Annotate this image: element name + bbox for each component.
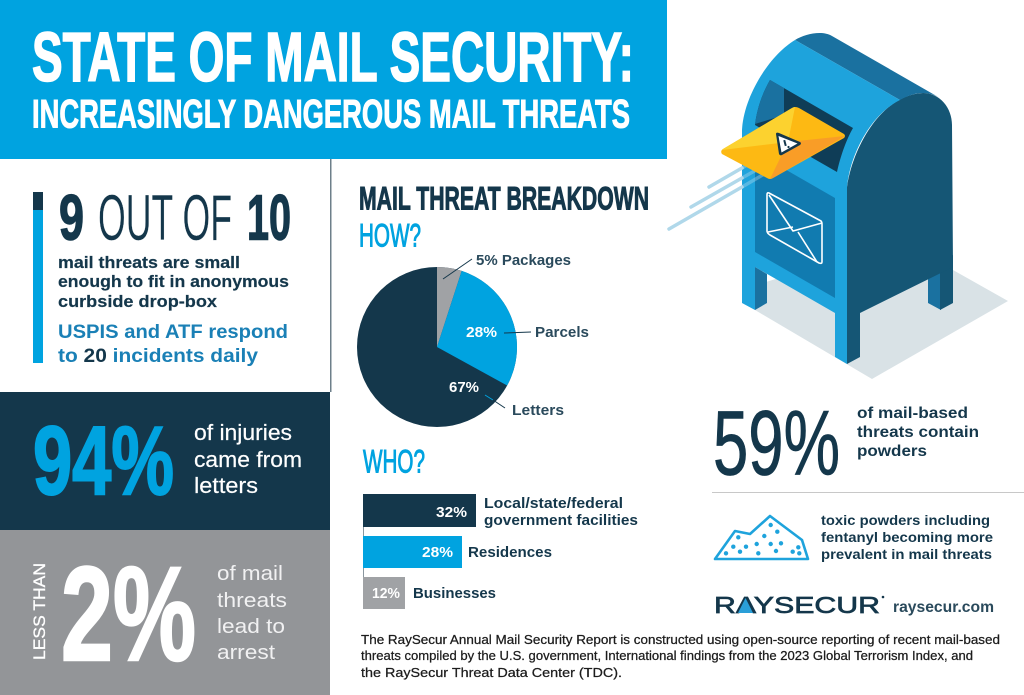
link: raysecur.com: raysecur.com [893, 599, 994, 616]
text block: 20 incidents daily: USPIS and ATF respond [58, 321, 288, 343]
footnote: The RaySecur Annual Mail Security Report is constructed using open-source reporting of recent mail-based [361, 633, 1000, 647]
pie chart [357, 253, 589, 427]
text block: of injuries [194, 420, 302, 498]
text block: of mail-based threats [857, 405, 979, 460]
text block: small enough: curbside drop-box [58, 293, 218, 311]
header banner [0, 0, 667, 159]
text block: small enough: mail threats are small [58, 254, 240, 272]
bar: residences: Residences [468, 545, 552, 561]
text block: of mail-based threats: powders [857, 443, 927, 460]
text block: 20 incidents daily [58, 321, 288, 367]
text block: of mail-based threats: threats contain [857, 424, 979, 441]
bar: government: government facilities [484, 513, 638, 529]
ground shadow [755, 240, 1008, 379]
bar: government: Local/state/federal [484, 496, 623, 512]
leader lines [443, 259, 531, 408]
text block: of mail threats: arrest [217, 641, 275, 664]
bar: government [363, 494, 638, 529]
statistic: 9 out of 10 [59, 181, 291, 254]
text block: toxic powders [821, 512, 993, 562]
bar: businesses: Businesses [413, 586, 496, 602]
text block: of injuries: of injuries [194, 420, 292, 445]
label: packages: 5% Packages [476, 253, 571, 269]
heading: how: HOW? [359, 218, 421, 254]
text block: toxic powders: toxic powders including [821, 512, 990, 528]
logo: raysecur: RAYSECUR [714, 592, 880, 618]
text block: of injuries: came from [194, 447, 302, 472]
text block: toxic powders: prevalent in mail threats [821, 546, 992, 562]
panel: 9 out of 10 [33, 181, 291, 367]
back leg [928, 255, 953, 310]
statistic: 2%: 2% [61, 540, 196, 689]
bar: residences: 28% [422, 545, 453, 561]
text block: small enough: enough to fit in anonymous [58, 273, 289, 291]
text block: of mail threats: threats [217, 589, 287, 612]
speed lines [669, 168, 742, 229]
bar: businesses: 12% [372, 586, 400, 602]
heading: mail threat breakdown: MAIL THREAT BREAKDOWN [359, 180, 649, 216]
title: INCREASINGLY DANGEROUS MAIL THREATS [32, 92, 630, 136]
bar: businesses [363, 577, 496, 609]
label: less than: LESS THAN [30, 563, 49, 660]
text block: small enough [58, 254, 289, 311]
panel: 94% injuries [0, 392, 330, 530]
bar: government: 32% [436, 505, 467, 521]
statistic: 9 out of 10: OUT OF [98, 181, 232, 254]
bar: residences [363, 536, 552, 568]
label: letters: Letters [512, 403, 564, 419]
envelope outline icon [767, 193, 822, 263]
icon: powder pile [715, 516, 808, 559]
panel: 2% arrests [0, 530, 330, 695]
warning sign [776, 133, 801, 155]
icon: mailbox illustration [669, 33, 1008, 379]
text block: toxic powders: fentanyl becoming more [821, 529, 993, 545]
footnote [361, 633, 1000, 680]
footnote: threats compiled by the U.S. government, International findings from the 2023 Global Terrorism Index, and [361, 649, 973, 663]
footnote: the RaySecur Threat Data Center (TDC). [361, 666, 622, 680]
title [32, 18, 634, 136]
statistic: 9 out of 10: 9 [59, 182, 84, 254]
box side [847, 93, 953, 364]
envelope with warning [721, 107, 845, 179]
mail slot [755, 80, 853, 172]
front leg inner [755, 267, 767, 310]
front panel [755, 152, 835, 298]
accent bar [33, 192, 43, 363]
statistic: 94%: 94% [33, 406, 174, 515]
label: parcels value: 28% [466, 325, 497, 341]
box front [742, 40, 900, 364]
heading: who: WHO? [363, 444, 425, 480]
statistic: 59%: 59% [713, 392, 840, 494]
text block: of mail threats: lead to [217, 615, 285, 638]
bar chart [363, 494, 638, 609]
label: letters value: 67% [449, 380, 479, 396]
text block: of mail-based threats: of mail-based [857, 405, 968, 422]
title: STATE OF MAIL SECURITY: [32, 18, 634, 96]
text block: 20 incidents daily: to 20 incidents daily [58, 345, 258, 367]
box top [795, 33, 940, 100]
text block: of mail threats: of mail [217, 562, 283, 585]
text block: of injuries: letters [194, 473, 258, 498]
statistic: 9 out of 10: 10 [247, 182, 291, 254]
text block: of mail threats [217, 562, 287, 664]
label: parcels: Parcels [535, 325, 589, 341]
